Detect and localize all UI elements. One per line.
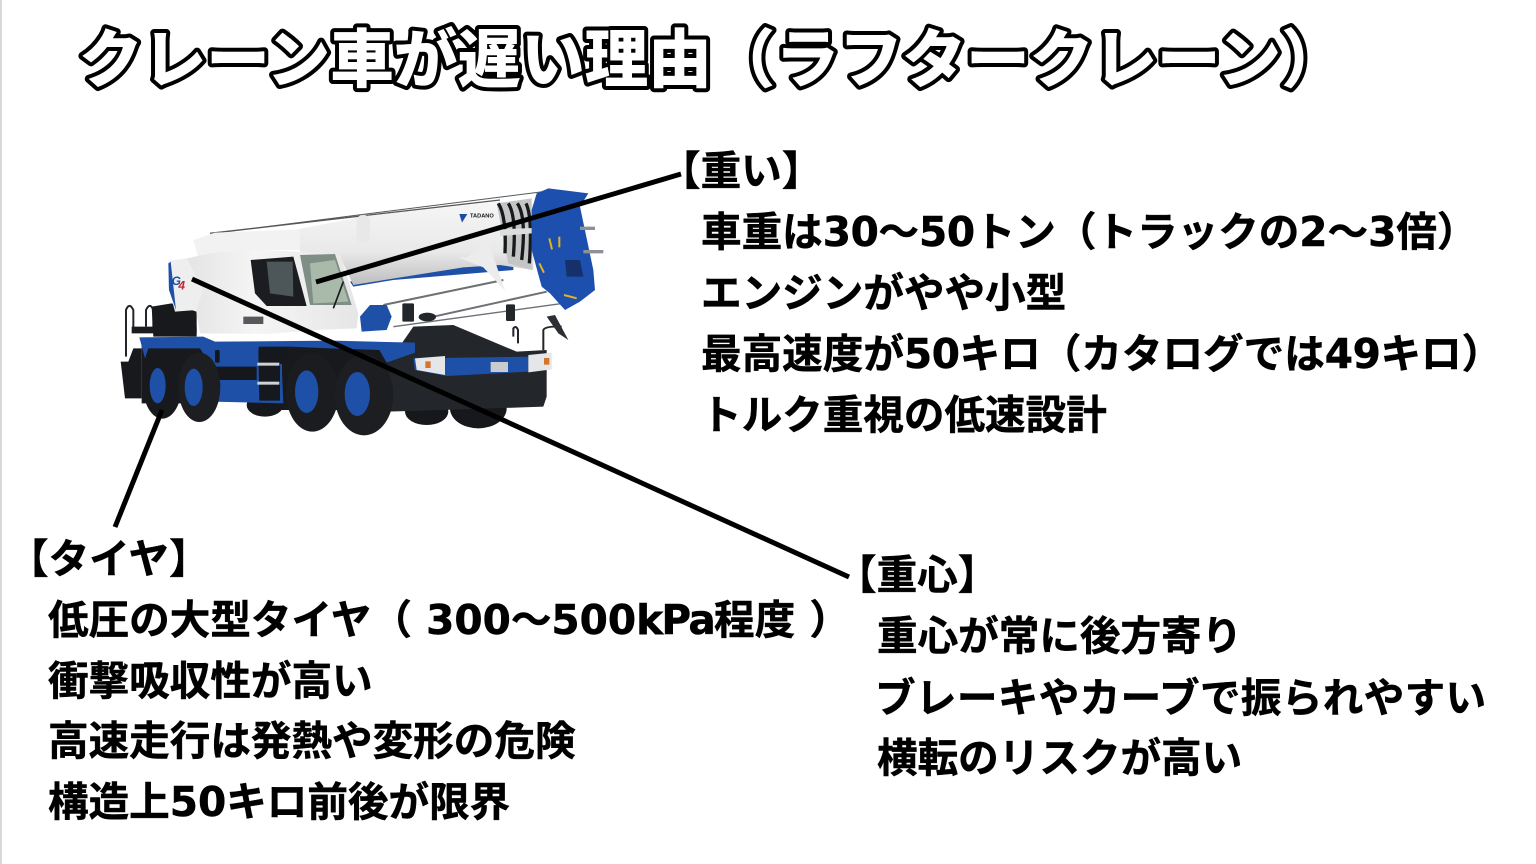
leader line: heavy — [316, 174, 681, 282]
leader line: centre of gravity — [192, 279, 849, 577]
logo on boom — [459, 214, 467, 223]
mirrors — [402, 303, 414, 322]
illustration: rough terrain crane with leader lines: TADANO — [470, 214, 494, 220]
line: low pressure: 低圧の大型タイヤ（ 300～500kPa程度 ） — [48, 596, 850, 644]
line: top speed: 最高速度が50キロ（カタログでは49キロ） — [701, 330, 1502, 378]
illustration: rough terrain crane with leader lines: 4 — [177, 278, 185, 292]
line: high speed danger: 高速走行は発熱や変形の危険 — [48, 717, 576, 765]
far wheels — [247, 388, 507, 428]
rear end block — [121, 348, 142, 398]
line: torque: トルク重視の低速設計 — [701, 391, 1107, 439]
blue chassis — [139, 337, 415, 403]
text block: tires — [8, 535, 850, 826]
line: rollover: 横転のリスクが高い — [877, 734, 1242, 782]
wheels — [143, 353, 393, 435]
front blue beam — [413, 357, 528, 376]
lower boom and cabin body — [193, 229, 300, 283]
line: rear biased: 重心が常に後方寄り — [877, 612, 1242, 660]
G4 badge: G — [172, 274, 181, 288]
line: shock absorption: 衝撃吸収性が高い — [48, 657, 373, 705]
heading: heavy: 【重い】 — [660, 147, 822, 195]
blue boom head — [532, 188, 595, 310]
text block: centre of gravity — [836, 551, 1486, 782]
rear ladder and rails — [126, 306, 562, 357]
text block: heavy — [660, 147, 1502, 439]
boom cables and struts — [210, 192, 563, 327]
cab windows — [251, 257, 307, 306]
heading: tires: 【タイヤ】 — [8, 535, 210, 583]
front bumper and black body — [383, 325, 547, 412]
dark wheel arches — [142, 345, 390, 410]
line: vehicle weight: 車重は30～50トン（トラックの2～3倍） — [701, 208, 1477, 256]
white boom — [297, 202, 533, 285]
title: クレーン車が遅い理由（ラフタークレーン） — [79, 9, 1345, 101]
blue cylinder — [360, 305, 392, 332]
line: sway: ブレーキやカーブで振られやすい — [875, 674, 1486, 722]
heading: centre of gravity: 【重心】 — [836, 551, 998, 599]
leader line: tires — [115, 410, 162, 527]
line: limit: 構造上50キロ前後が限界 — [48, 778, 510, 826]
line: engine: エンジンがやや小型 — [701, 269, 1066, 317]
